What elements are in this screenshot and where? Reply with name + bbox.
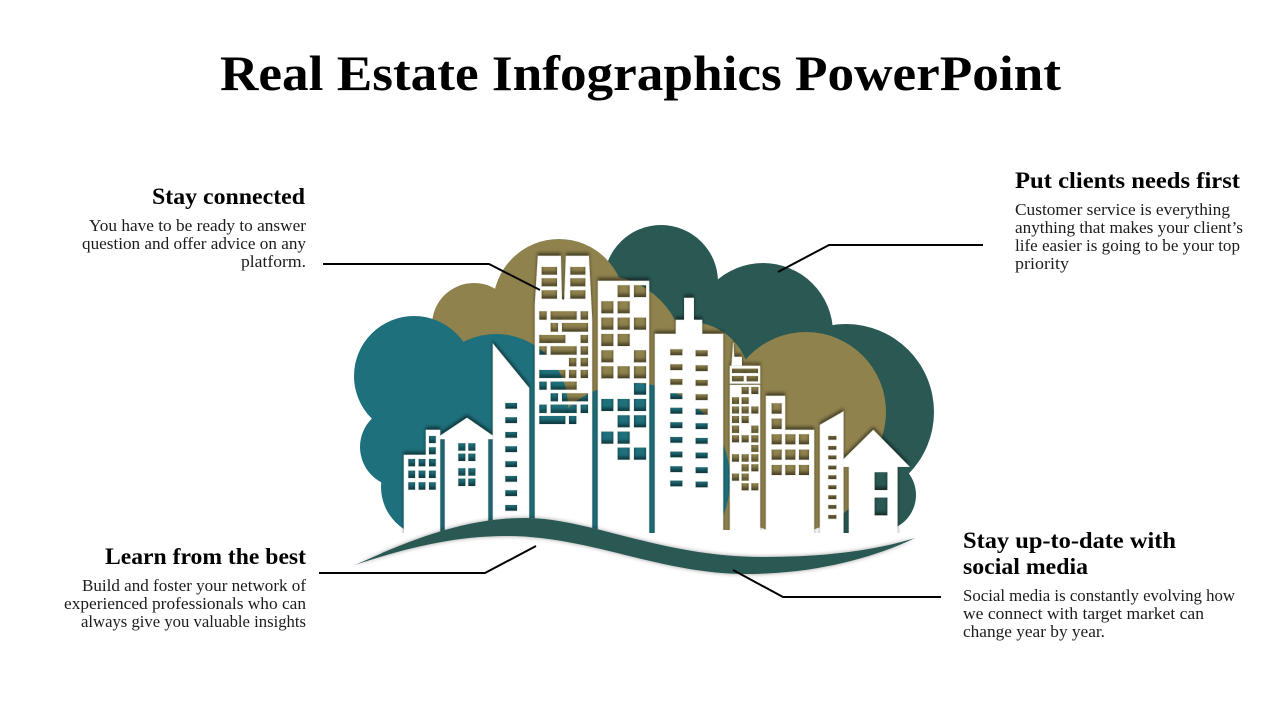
body text: experienced professionals who can bbox=[64, 594, 306, 613]
body text: Build and foster your network of bbox=[82, 576, 307, 595]
body text: You have to be ready to answer bbox=[89, 216, 307, 235]
building: pitched roof block bbox=[440, 418, 493, 540]
heading: Put clients needs first bbox=[1015, 168, 1240, 193]
body text: always give you valuable insights bbox=[81, 612, 306, 631]
building: narrow slanted tower bbox=[820, 412, 843, 540]
text block: put clients needs first bbox=[1015, 168, 1243, 273]
heading: social media bbox=[963, 554, 1089, 579]
ground curve bbox=[355, 518, 915, 574]
body text bbox=[963, 586, 1235, 641]
backdrop: dark green tree circles bbox=[604, 225, 934, 535]
heading bbox=[963, 528, 1176, 579]
text block: learn from the best bbox=[64, 544, 307, 631]
body text: we connect with target market can bbox=[963, 604, 1204, 623]
leader line: put clients needs first bbox=[778, 245, 983, 272]
building: L-shaped block bbox=[766, 396, 814, 540]
body text bbox=[64, 576, 307, 631]
leader line: learn from the best bbox=[319, 546, 536, 573]
body text: question and offer advice on any bbox=[82, 234, 307, 253]
body text: life easier is going to be your top bbox=[1015, 236, 1240, 255]
buildings bbox=[404, 256, 909, 540]
text block: stay up-to-date with social media bbox=[963, 528, 1235, 641]
building: small left block bbox=[404, 430, 440, 540]
leader line: stay connected bbox=[323, 264, 540, 290]
body text: priority bbox=[1015, 254, 1070, 273]
building: small house bbox=[843, 430, 909, 540]
body text: Customer service is everything bbox=[1015, 200, 1230, 219]
illustration: city skyline bbox=[340, 225, 940, 603]
building: twin-top tower bbox=[535, 256, 592, 540]
text block: stay connected bbox=[82, 184, 307, 271]
body text: platform. bbox=[241, 252, 306, 271]
building: slanted tower bbox=[493, 344, 529, 540]
heading: Learn from the best bbox=[105, 544, 306, 569]
heading: Stay up-to-date with bbox=[963, 528, 1176, 553]
body text: change year by year. bbox=[963, 622, 1105, 641]
body text bbox=[1015, 200, 1243, 273]
body text: anything that makes your client’s bbox=[1015, 218, 1243, 237]
leader line: stay up-to-date bbox=[733, 570, 941, 597]
backdrop: olive tree circles bbox=[432, 239, 886, 533]
body text bbox=[82, 216, 307, 271]
building: stepped tower with antenna bbox=[655, 298, 723, 540]
backdrop: teal tree circles bbox=[354, 316, 730, 577]
heading: Stay connected bbox=[152, 184, 305, 209]
building: square window tower bbox=[598, 281, 649, 540]
white foreground below skyline bbox=[340, 518, 940, 603]
title: Real Estate Infographics PowerPoint bbox=[220, 45, 1061, 101]
body text: Social media is constantly evolving how bbox=[963, 586, 1235, 605]
building: spire tower bbox=[730, 343, 760, 540]
